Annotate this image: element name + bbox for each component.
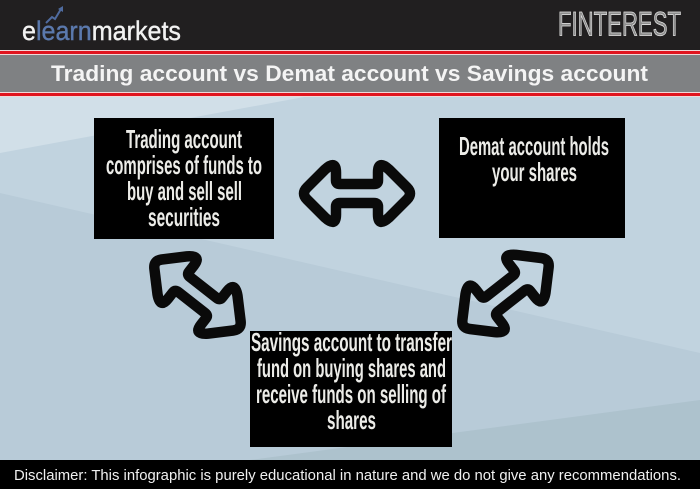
panel: savings account: shares [327, 405, 376, 435]
panel: savings account: fund on buying shares and [257, 353, 446, 383]
arrow: trading to savings [138, 240, 257, 350]
disclaimer bar: Disclaimer: This infographic is purely educational in nature and we do not give any recommendations. [14, 467, 681, 484]
title band [0, 50, 700, 97]
disclaimer bar [0, 460, 700, 489]
panel: trading account [94, 118, 274, 239]
panel: savings account: Savings account to transfer [251, 327, 452, 357]
panel: demat account: your shares [492, 157, 577, 187]
arrow: trading to demat [304, 165, 410, 222]
title: Trading account vs Demat account vs Savings account [51, 61, 649, 86]
panel: savings account [250, 327, 452, 447]
panel: demat account [439, 118, 625, 238]
panel: trading account: buy and sell sell [127, 176, 242, 206]
panel: savings account: receive funds on selling of [256, 379, 446, 409]
panel: trading account: securities [148, 202, 220, 232]
arrow: demat to savings [446, 239, 565, 348]
panel: trading account: comprises of funds to [106, 150, 262, 180]
logo: elearnmarkets: elearnmarkets [22, 16, 181, 46]
panel: trading account: Trading account [126, 124, 242, 154]
header bar [0, 0, 700, 50]
